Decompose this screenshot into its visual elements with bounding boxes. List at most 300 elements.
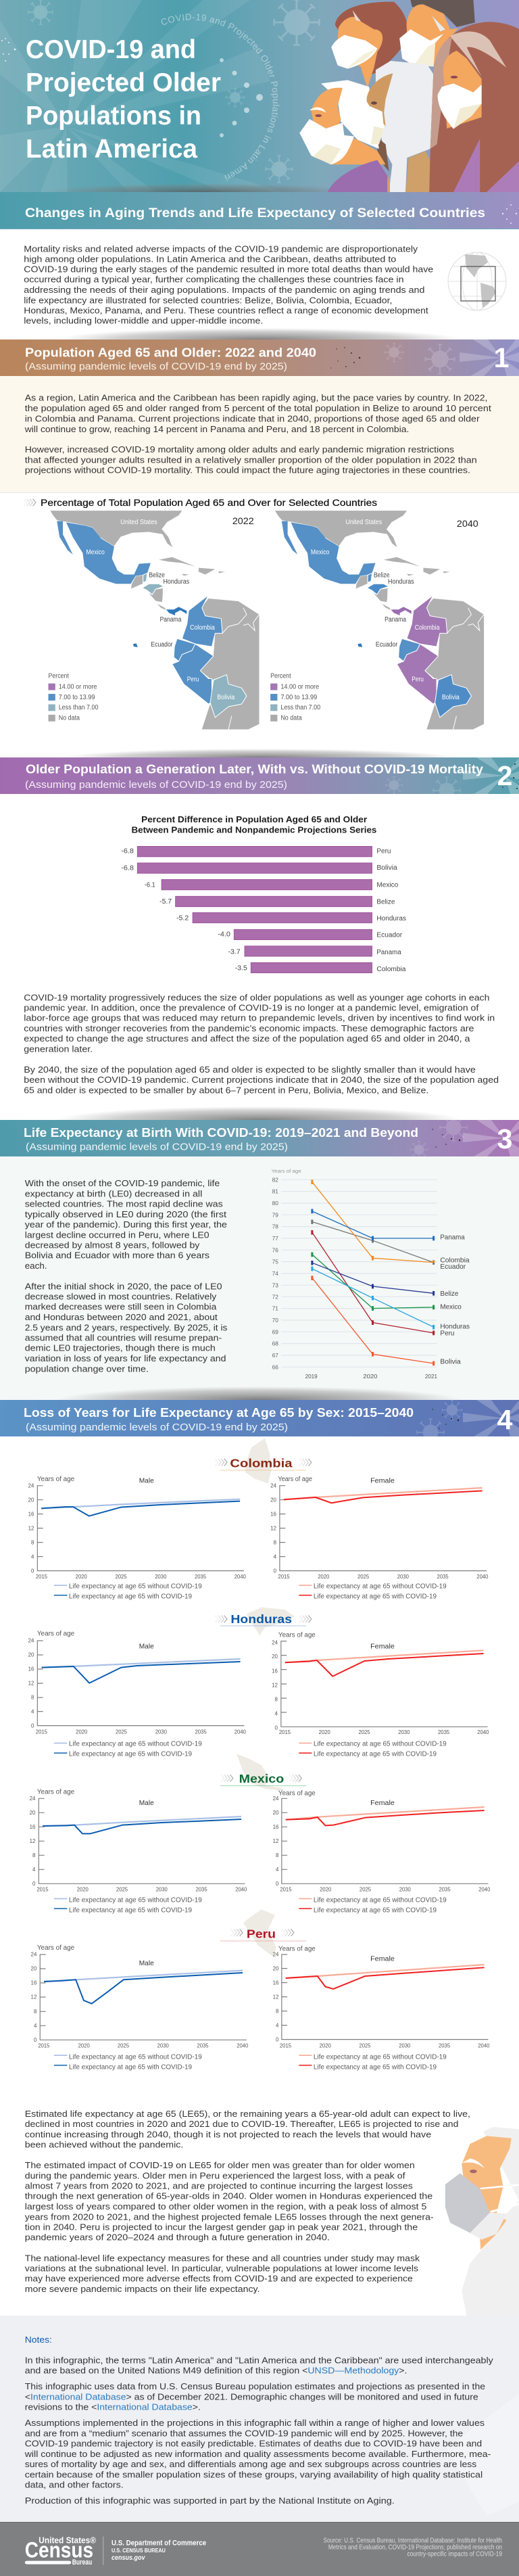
chart: Peru male: 20	[31, 1966, 37, 1972]
series labels: Colombia	[440, 1257, 470, 1264]
chart: Colombia male: Male	[139, 1476, 154, 1484]
country heading: Colombia: Colombia	[230, 1456, 293, 1470]
series labels	[440, 1234, 470, 1365]
section 4 header band	[0, 1400, 519, 1436]
chart: Colombia male: Life expectancy at age 65 without COVID-19	[69, 1582, 202, 1590]
panel: section 1 text: that affected younger adults resulted in a relatively smaller proportion of the older population in 2022 than	[25, 456, 477, 465]
chart: Peru female: 2035	[439, 2043, 450, 2049]
axis labels: 75	[272, 1259, 278, 1265]
chart: Peru male: Life expectancy at age 65 with COVID-19	[69, 2063, 192, 2071]
country heading: Mexico: Mexico	[239, 1772, 284, 1785]
chart title: Percent Difference in Population Aged 65 and Older	[141, 815, 367, 824]
section 3 text: Bolivia and Ecuador with more than 6 years	[25, 1251, 209, 1261]
chart: Colombia male: 20	[28, 1497, 34, 1503]
panel: notes	[0, 2316, 519, 2522]
chart: Colombia female: 2040	[476, 1574, 489, 1580]
grid lines	[281, 1179, 437, 1367]
chart: Colombia male: 2030	[155, 1574, 167, 1580]
chart: Honduras male: Life expectancy at age 65 without COVID-19	[69, 1739, 202, 1748]
chart: Honduras female: 2035	[438, 1730, 449, 1735]
bars	[137, 846, 372, 973]
section 3 text: 2.5 years and 2 years, respectively. By 2025, it is	[25, 1323, 227, 1332]
bar country labels: Belize	[376, 898, 395, 906]
chart: Colombia male: Life expectancy at age 65 with COVID-19	[69, 1592, 192, 1600]
chart: Colombia male: 0	[31, 1568, 34, 1574]
axis labels: 82	[272, 1177, 278, 1184]
section 3 text: decrease slowed in most countries. Relatively	[25, 1292, 217, 1302]
dot arrow	[220, 58, 263, 137]
department text: U.S. Department of Commerce	[112, 2538, 206, 2547]
chart: Peru male: 0	[34, 2038, 37, 2043]
shadow above section 4	[57, 1386, 462, 1413]
chart: Honduras female: Years of age	[278, 1631, 316, 1639]
subtitle band	[0, 192, 519, 229]
chart: Mexico female: 2025	[360, 1887, 371, 1893]
chart: Peru female: 2025	[359, 2043, 371, 2049]
map: 2022: Mexico	[86, 548, 105, 556]
chart: Colombia female: Life expectancy at age 65 without COVID-19	[314, 1582, 447, 1590]
bar values: -5.7	[159, 898, 172, 906]
chart: Peru female: 4	[276, 2023, 279, 2029]
chart: Honduras female	[272, 1631, 489, 1758]
chart: Colombia female: 8	[274, 1540, 276, 1546]
chart: Mexico female: 12	[273, 1839, 279, 1844]
intro text block: levels, including lower-middle and upper-middle income.	[24, 316, 263, 326]
chart: Honduras male: Years of age	[37, 1630, 74, 1637]
series labels: Bolivia	[440, 1358, 461, 1365]
chart: Peru female: Years of age	[278, 1945, 316, 1952]
chart: Colombia female: 16	[270, 1512, 276, 1518]
chart: Mexico male: 12	[30, 1839, 36, 1844]
chart: Peru female: 0	[276, 2037, 279, 2043]
chart: Peru female: 8	[276, 2009, 279, 2015]
chart: Colombia male: 2015	[36, 1574, 47, 1580]
chart: Honduras female: Life expectancy at age 65 with COVID-19	[314, 1750, 437, 1758]
chart: Colombia female: 2030	[397, 1574, 409, 1580]
map: 2040: Honduras	[388, 578, 414, 586]
chart: Colombia female: 2035	[437, 1574, 449, 1580]
panel: section 1 text: will continue to grow, reaching 14 percent in Panama and Peru, and 18 percent in Colombia.	[24, 425, 409, 434]
chart: Peru female: 16	[273, 1980, 279, 1986]
section 3 text: marked decreases were still seen in Colombia	[25, 1303, 217, 1312]
chart: Peru female: 20	[273, 1966, 279, 1972]
notes text: and are based on the United Nations M49 definition of this region <UNSD—Methodology>.	[25, 2366, 407, 2376]
axis labels: 68	[272, 1341, 278, 1347]
chart: Mexico female: 2035	[439, 1887, 451, 1893]
department text	[112, 2538, 206, 2561]
axis labels: 74	[272, 1271, 278, 1277]
chart: Peru male: 2020	[78, 2043, 90, 2049]
chart: Mexico male: 4	[32, 1867, 36, 1873]
chart: Honduras male: Male	[139, 1642, 154, 1650]
chart: Honduras male: 16	[28, 1666, 34, 1672]
country silhouette: Honduras	[247, 1608, 295, 1635]
chart: Peru female: 2040	[478, 2043, 490, 2049]
title: COVID-19 and	[26, 35, 196, 64]
chart: Mexico male: Life expectancy at age 65 without COVID-19	[69, 1896, 202, 1904]
series labels: Belize	[440, 1290, 459, 1297]
chart: Honduras male	[28, 1630, 246, 1758]
illustration: masked older adults	[299, 0, 519, 192]
axis labels: Years of age	[272, 1169, 301, 1174]
chart: Honduras male: 2020	[76, 1729, 88, 1735]
small dots left	[1, 38, 16, 62]
section 2 text: generation later.	[24, 1045, 93, 1054]
section 3 header band: Life Expectancy at Birth With COVID-19: 2019–2021 and Beyond	[24, 1125, 418, 1140]
panel: section 1 text: However, increased COVID-19 mortality among older adults and early pandemic migration restrictions	[25, 445, 454, 454]
axis labels: 78	[272, 1224, 278, 1230]
axis labels: 72	[272, 1294, 278, 1301]
shadow above section 1	[57, 328, 462, 351]
series: Peru	[312, 1230, 434, 1335]
chart: Mexico male: 2015	[36, 1887, 49, 1893]
chart: Peru male: 16	[31, 1980, 37, 1986]
chart: Colombia male: Years of age	[37, 1475, 74, 1482]
hero banner	[0, 0, 519, 192]
chart: Mexico male	[30, 1788, 247, 1914]
section 3 text: variation in loss of years for life expectancy and	[25, 1354, 226, 1363]
map: 2040: Belize	[374, 571, 389, 579]
country heading: Honduras: Honduras	[230, 1612, 292, 1626]
chart: Honduras female: 2015	[279, 1730, 291, 1735]
section 2 text: expected to change the age structures and affect the size of the population aged 65 and older in 2040, a	[24, 1035, 470, 1044]
panel: section 1 text	[0, 376, 519, 493]
chart: Mexico female: 24	[273, 1796, 279, 1802]
chart: Mexico male: 8	[32, 1853, 36, 1858]
chart: Peru male: 2035	[197, 2043, 209, 2049]
chart: Honduras male: 2035	[195, 1729, 207, 1735]
chart: Honduras female: 12	[272, 1683, 278, 1689]
section 4 commentary text: more severe pandemic impacts on their life expectancy.	[25, 2285, 260, 2294]
country heading: Peru: Peru	[247, 1927, 276, 1940]
series: Honduras	[312, 1267, 434, 1330]
chart: Mexico female: Life expectancy at age 65 with COVID-19	[314, 1906, 437, 1914]
country heading: Mexico	[220, 1772, 306, 1786]
map: 2040: Bolivia	[442, 694, 460, 701]
chart: Colombia female: Years of age	[278, 1475, 312, 1482]
title: Populations in	[26, 101, 201, 131]
notes heading: Notes:	[25, 2335, 52, 2345]
map legend: 2022	[49, 673, 98, 722]
section 4 commentary text: been achieved without the pandemic.	[25, 2140, 183, 2150]
chart title: Between Pandemic and Nonpandemic Projections Series	[131, 826, 376, 835]
bar country labels	[376, 847, 406, 973]
chart: Honduras female: 16	[272, 1668, 278, 1675]
chart: Peru female	[273, 1945, 490, 2071]
section 3 text: population change over time.	[25, 1364, 149, 1374]
shadow above section 3	[57, 1106, 462, 1133]
bar chart: percent difference	[121, 815, 406, 973]
axis labels: 81	[272, 1189, 278, 1195]
section 3 text: With the onset of the COVID-19 pandemic, life	[25, 1179, 220, 1188]
map legend: 2022: 14.00 or more	[59, 684, 97, 690]
chart: Peru male: 12	[31, 1994, 37, 2000]
map legend: 2040: 14.00 or more	[280, 684, 319, 690]
chart: Peru male: 2030	[157, 2043, 169, 2049]
axis labels: 2021	[425, 1374, 437, 1380]
chart: Mexico male: 20	[30, 1810, 36, 1816]
panel: Mexico	[30, 1754, 491, 1914]
series: Bolivia	[312, 1275, 434, 1365]
chart: Colombia male: 2040	[234, 1574, 246, 1580]
title: Latin America	[26, 135, 197, 164]
chart: Honduras male: Life expectancy at age 65 with COVID-19	[69, 1750, 192, 1758]
chart: Honduras female: 2025	[358, 1730, 370, 1735]
map: 2040: United States	[345, 519, 382, 526]
section 4 header band: (Assuming pandemic levels of COVID-19 end by 2025)	[26, 1422, 288, 1433]
department text: U.S. CENSUS BUREAU	[112, 2548, 166, 2554]
chart: Colombia female: 20	[270, 1497, 276, 1503]
map: 2022: Peru	[187, 676, 199, 683]
map: 2040	[274, 511, 484, 730]
section 4 commentary text: pandemic years of 2020–2024 and through a future generation in 2040.	[25, 2232, 330, 2243]
chart: Mexico female: 4	[276, 1867, 279, 1873]
chart: Honduras male: 2040	[234, 1729, 246, 1735]
chart: Honduras male: 8	[31, 1695, 34, 1701]
section 4 header band: 4	[497, 1404, 513, 1435]
axis labels: 69	[272, 1330, 278, 1336]
map: 2040: Peru	[412, 676, 424, 683]
map: 2022: 2022	[232, 517, 254, 527]
bar values: -5.2	[176, 914, 189, 922]
bar values: -3.7	[228, 949, 241, 956]
notes text	[24, 2356, 494, 2506]
chart: Colombia male: 2020	[76, 1574, 87, 1580]
chart: Colombia male: 12	[28, 1526, 34, 1532]
chart title	[131, 815, 376, 835]
section 3 text: year of the pandemic). During this first year, the	[25, 1220, 227, 1230]
axis labels: 2020	[363, 1374, 378, 1380]
map: 2040: 2040	[457, 519, 478, 530]
chart: Colombia male: 4	[31, 1554, 34, 1560]
chart: Peru female: 12	[273, 1994, 279, 2000]
panel: Colombia	[28, 1438, 489, 1600]
map: 2022: Colombia	[190, 624, 216, 632]
chart: Colombia male: 16	[28, 1512, 34, 1518]
axis labels: 67	[272, 1353, 278, 1359]
section 3 text: selected countries. The most rapid decline was	[25, 1200, 223, 1209]
axis labels: 76	[272, 1248, 278, 1254]
chart: Honduras male: 2025	[116, 1729, 127, 1735]
bar values: -6.8	[121, 848, 134, 855]
chart: Honduras female: Life expectancy at age 65 without COVID-19	[314, 1739, 447, 1748]
section 3 text: and Honduras between 2020 and 2021, about	[25, 1313, 218, 1322]
country silhouette: Mexico	[237, 1754, 285, 1791]
map legend: 2040: Less than 7.00	[280, 704, 320, 711]
bar country labels: Ecuador	[376, 932, 402, 939]
series labels: Honduras	[440, 1323, 470, 1330]
country heading: Peru	[220, 1927, 306, 1941]
chart: Peru female: 24	[273, 1952, 279, 1958]
chart: Honduras male: 2015	[36, 1729, 47, 1735]
chart: Honduras female: 24	[272, 1640, 278, 1646]
chart: Mexico male: 24	[30, 1796, 36, 1802]
chart: Peru male: Life expectancy at age 65 without COVID-19	[69, 2053, 202, 2061]
map legend: 2040: 7.00 to 13.99	[280, 694, 317, 701]
chart: Mexico female	[273, 1789, 491, 1914]
chart: Mexico male: Life expectancy at age 65 with COVID-19	[69, 1906, 192, 1914]
department text: census.gov	[112, 2554, 145, 2561]
chart: Honduras male: 4	[31, 1709, 34, 1715]
series labels: Ecuador	[440, 1263, 466, 1270]
chart: Peru male: 2025	[118, 2043, 129, 2049]
chart: Mexico male: 2035	[195, 1887, 207, 1893]
map legend: 2022: No data	[59, 714, 80, 722]
chart: Mexico male: 2020	[77, 1887, 89, 1893]
chart: Colombia female: Female	[370, 1476, 395, 1484]
section 3 text: typically observed in LE0 during 2020 (the first	[25, 1210, 226, 1219]
map: 2040: Panama	[385, 616, 407, 624]
chart: Mexico male: 2025	[116, 1887, 128, 1893]
section 2 text: By 2040, the size of the population aged 65 and older is expected to be slightly smaller than it would have	[24, 1065, 476, 1075]
chart: Peru male: 2015	[38, 2043, 50, 2049]
chart: Mexico female: Life expectancy at age 65 without COVID-19	[314, 1896, 447, 1904]
axis labels	[272, 1169, 437, 1380]
chart: Honduras female: 20	[272, 1654, 278, 1660]
map legend: 2040	[270, 673, 320, 722]
panel: Peru	[31, 1909, 490, 2071]
chart: Colombia male	[28, 1475, 246, 1600]
section 4 commentary text	[25, 2109, 470, 2294]
section 3 text: expectancy at birth (LE0) decreased in all	[25, 1189, 202, 1199]
intro text block: life expectancy are illustrated for selected countries: Belize, Bolivia, Colombia, Ecuador,	[24, 296, 392, 305]
chart: Mexico male: Male	[139, 1798, 154, 1806]
chart: Colombia female: 2015	[278, 1574, 290, 1580]
chart: Colombia female: Life expectancy at age 65 with COVID-19	[314, 1592, 437, 1600]
axis labels: 77	[272, 1236, 278, 1242]
chart: Honduras male: 0	[31, 1723, 34, 1729]
title	[26, 35, 221, 164]
chart: Honduras female: 8	[275, 1697, 278, 1703]
chart: Colombia male: 2025	[115, 1574, 127, 1580]
bar country labels: Colombia	[376, 966, 406, 973]
chart: Mexico female: Years of age	[278, 1789, 316, 1797]
section 2 header band	[0, 757, 519, 794]
axis labels: 80	[272, 1201, 278, 1207]
section 3 text: each.	[25, 1261, 47, 1271]
chart: Peru male: 2040	[237, 2043, 249, 2049]
chart: Honduras female: 2040	[477, 1730, 489, 1735]
map: 2022	[49, 511, 260, 730]
section 3 text: decreased by almost 8 years, followed by	[25, 1241, 200, 1250]
map: 2040: Ecuador	[376, 641, 397, 649]
map: 2040: Colombia	[415, 624, 440, 632]
section 3 text: demic LE0 trajectories, though there is much	[25, 1343, 216, 1353]
map heading: Percentage of Total Population Aged 65 and Over for Selected Countries	[41, 498, 377, 508]
chart: Colombia male: 2035	[195, 1574, 206, 1580]
series labels: Mexico	[440, 1303, 462, 1311]
map legend: 2022: 7.00 to 13.99	[59, 694, 95, 701]
chart: Mexico female: 20	[273, 1810, 279, 1816]
series labels: Panama	[440, 1234, 465, 1241]
bar country labels: Panama	[376, 949, 401, 956]
chart: Peru female: 2030	[399, 2043, 411, 2049]
axis labels: 79	[272, 1213, 278, 1219]
section 2 header band: 2	[497, 760, 512, 791]
axis labels: 71	[272, 1306, 278, 1312]
map legend: 2022: Less than 7.00	[59, 704, 98, 711]
chart: Peru female: Life expectancy at age 65 without COVID-19	[314, 2053, 447, 2061]
chart: Colombia male: 24	[28, 1483, 34, 1489]
intro text block	[24, 244, 433, 326]
chart: Peru female: Female	[370, 1954, 395, 1963]
axis labels: 2019	[305, 1374, 318, 1380]
chart: Mexico male: 2040	[235, 1887, 247, 1893]
axis labels: 70	[272, 1318, 278, 1324]
chart: Honduras female: 4	[275, 1711, 278, 1717]
section 1 header band: Population Aged 65 and Older: 2022 and 2040	[25, 345, 316, 360]
chart: Mexico female: 2030	[399, 1887, 411, 1893]
notes text: data, and other factors.	[25, 2481, 124, 2490]
chart: Peru male: 8	[34, 2009, 37, 2015]
bar values: -3.5	[235, 965, 247, 972]
panel: section 1 text: projections without COVID-19 mortality. This could impact the future aging trajectories in these countries.	[25, 466, 470, 475]
bar country labels: Peru	[376, 847, 391, 855]
chart: Colombia female: 12	[270, 1526, 276, 1532]
section 3 header band: (Assuming pandemic levels of COVID-19 end by 2025)	[26, 1142, 288, 1152]
bar country labels: Bolivia	[376, 864, 398, 872]
chart: Peru male: 4	[34, 2023, 37, 2029]
section 4 header band: Loss of Years for Life Expectancy at Age 65 by Sex: 2015–2040	[24, 1405, 414, 1420]
country silhouette: Colombia	[245, 1438, 272, 1483]
chart: Mexico female: 2015	[280, 1887, 292, 1893]
section 3 text: largest decline occurred in Peru, where LE0	[25, 1230, 209, 1240]
panel: Honduras	[28, 1608, 489, 1758]
chart: Peru female: 2020	[320, 2043, 331, 2049]
section 1 header band	[0, 339, 519, 376]
chart: Peru male: Male	[139, 1959, 154, 1967]
chart: Colombia female	[270, 1475, 489, 1600]
subtitle band: Changes in Aging Trends and Life Expectancy of Selected Countries	[25, 206, 485, 220]
logo: Census Bureau: Census	[25, 2538, 93, 2562]
map legend: 2022: Percent	[49, 673, 69, 680]
illustration: older man in mask	[445, 2127, 519, 2316]
series: Panama	[312, 1209, 434, 1240]
chart: Mexico female: 2020	[320, 1887, 332, 1893]
logo: Census Bureau: Bureau	[72, 2558, 92, 2566]
footer	[0, 2522, 519, 2576]
chart: Colombia female: 0	[274, 1568, 276, 1574]
title: Projected Older	[26, 68, 221, 97]
intro text block: high among older populations. In Latin America and the Caribbean, deaths attributed to	[24, 254, 396, 264]
chart: Colombia female: 2020	[318, 1574, 330, 1580]
bar values: -4.0	[218, 931, 230, 938]
map: 2022: Bolivia	[217, 694, 235, 701]
axis labels: 73	[272, 1283, 278, 1289]
intro text block: occurred during a typical year, further complicating the challenges these countries face in	[24, 275, 404, 285]
series: Belize	[312, 1261, 434, 1296]
source text	[324, 2537, 502, 2558]
series labels: Peru	[440, 1330, 454, 1337]
section 3 text	[25, 1179, 227, 1374]
map: 2022: Belize	[149, 571, 165, 579]
chart: Colombia male: 8	[31, 1540, 34, 1546]
axis labels: 66	[272, 1365, 278, 1371]
icon: virus decorations	[28, 0, 320, 183]
series: Colombia	[312, 1219, 434, 1265]
chart: Honduras female: 2030	[398, 1730, 410, 1735]
chart: Mexico female: 16	[273, 1825, 279, 1830]
chart: Colombia female: 24	[270, 1483, 276, 1489]
logo: Census Bureau: United States®	[39, 2536, 96, 2546]
chart: Honduras female: Female	[370, 1642, 395, 1650]
chart: Peru male	[31, 1944, 249, 2071]
map legend: 2040: No data	[280, 714, 302, 722]
series: Ecuador	[312, 1179, 434, 1263]
chart: Colombia female: 4	[274, 1554, 276, 1560]
chart: Mexico female: Female	[370, 1798, 395, 1806]
line chart: life expectancy at birth	[272, 1169, 470, 1380]
